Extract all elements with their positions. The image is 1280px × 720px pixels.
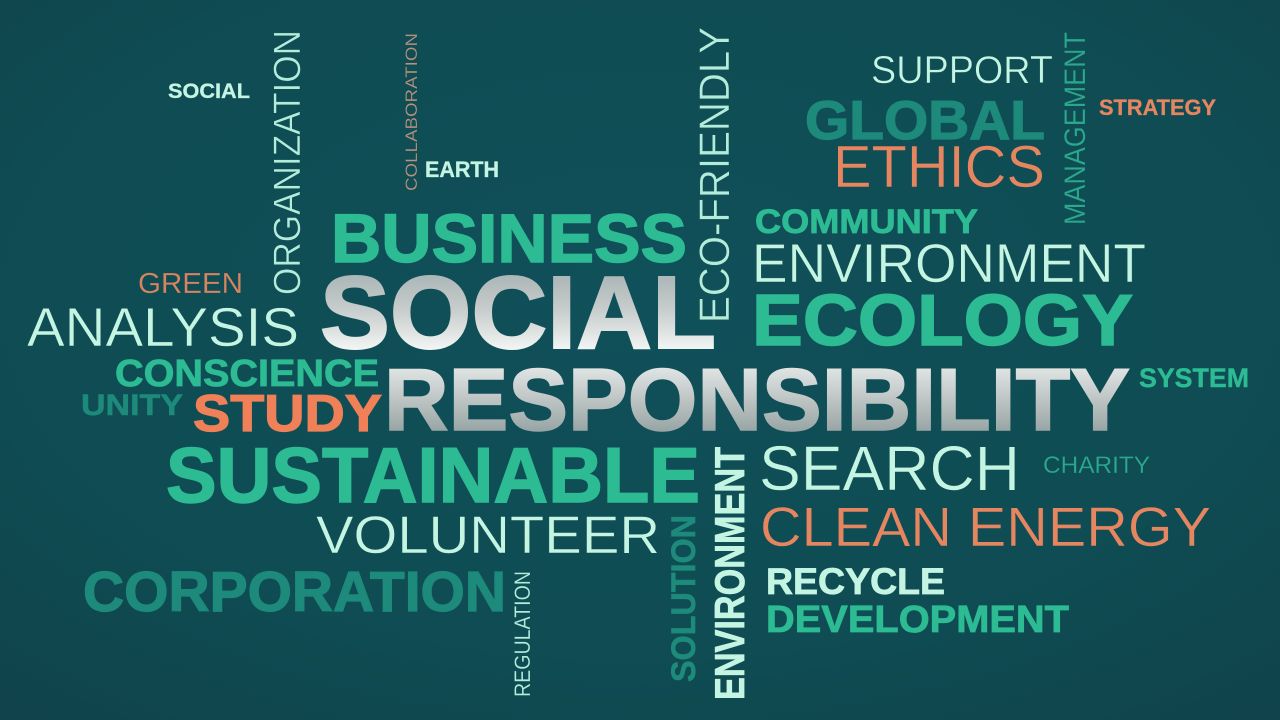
word: UNITY: UNITY [81,389,183,422]
word: EARTH: EARTH [425,157,499,182]
word: RECYCLE: RECYCLE [766,561,945,602]
word: GREEN: GREEN [138,268,243,300]
word: SOCIAL (large): SOCIAL [320,255,716,370]
word: MANAGEMENT (vertical): MANAGEMENT [1059,32,1092,225]
word: GLOBAL: GLOBAL [805,89,1045,151]
word: COLLABORATION (vertical): COLLABORATION [402,33,421,191]
word: ETHICS: ETHICS [833,134,1045,200]
word: SEARCH: SEARCH [759,434,1020,504]
word: SYSTEM: SYSTEM [1139,363,1249,393]
word: STUDY: STUDY [193,385,382,443]
word: ECO-FRIENDLY (vertical): ECO-FRIENDLY [691,27,739,323]
word: COMMUNITY: COMMUNITY [755,203,978,241]
word: ECOLOGY: ECOLOGY [752,281,1133,361]
word: ENVIRONMENT (vertical): ENVIRONMENT [706,447,753,700]
word: DEVELOPMENT: DEVELOPMENT [766,599,1069,641]
word: ORGANIZATION (vertical): ORGANIZATION [267,30,309,295]
word: CONSCIENCE: CONSCIENCE [115,353,379,395]
word: RESPONSIBILITY: RESPONSIBILITY [384,350,1130,449]
word: BUSINESS: BUSINESS [331,200,687,277]
word: CHARITY: CHARITY [1043,452,1150,479]
word: STRATEGY: STRATEGY [1099,95,1216,120]
word: CORPORATION: CORPORATION [83,560,506,624]
word: SUSTAINABLE: SUSTAINABLE [166,431,700,519]
word: VOLUNTEER: VOLUNTEER [316,506,660,565]
word: SOCIAL (small): SOCIAL [168,80,250,103]
word: REGULATION (vertical): REGULATION [510,571,535,697]
word: CLEAN ENERGY: CLEAN ENERGY [760,495,1211,558]
word: ANALYSIS: ANALYSIS [27,296,299,358]
word: ENVIRONMENT: ENVIRONMENT [752,232,1146,294]
word: SOLUTION (vertical): SOLUTION [665,515,703,682]
word: SUPPORT: SUPPORT [871,49,1053,92]
